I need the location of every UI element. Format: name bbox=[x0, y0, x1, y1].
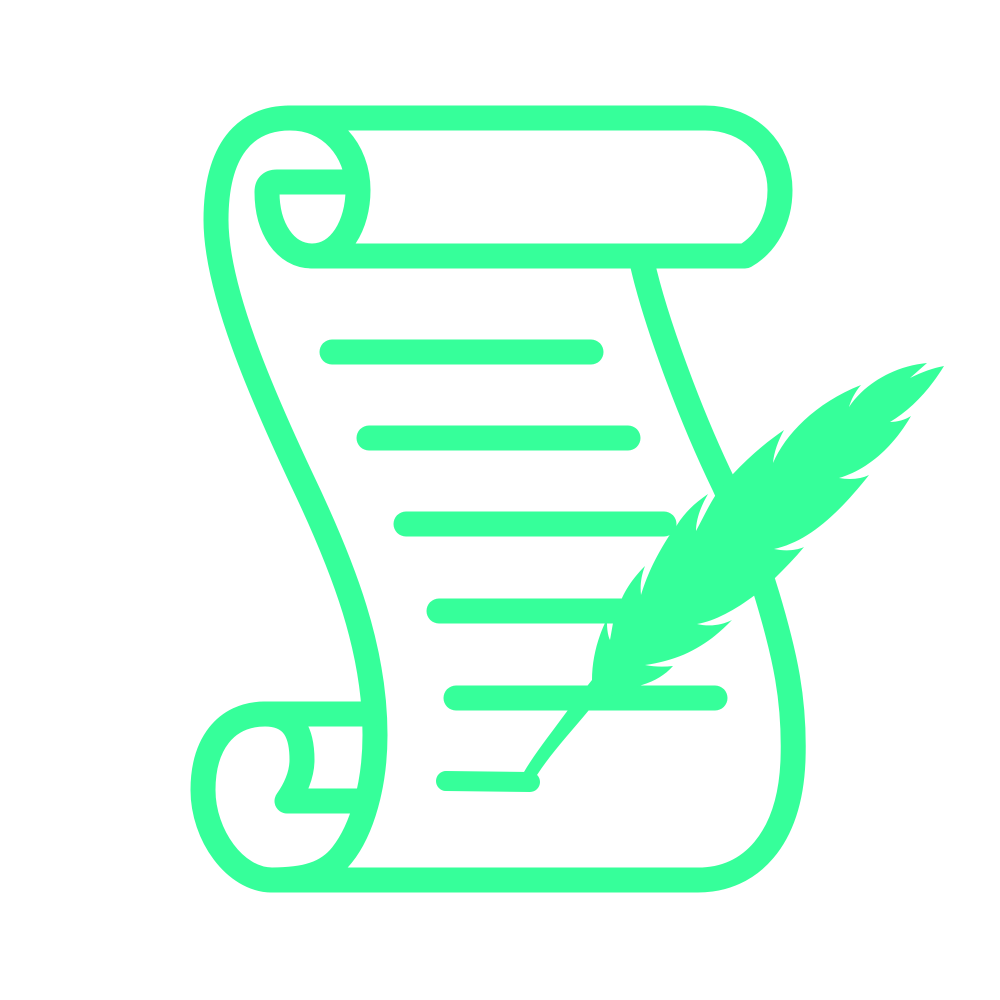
icon: quill feather bbox=[524, 363, 944, 775]
text lines bbox=[332, 352, 715, 782]
scroll outline bbox=[203, 118, 793, 880]
